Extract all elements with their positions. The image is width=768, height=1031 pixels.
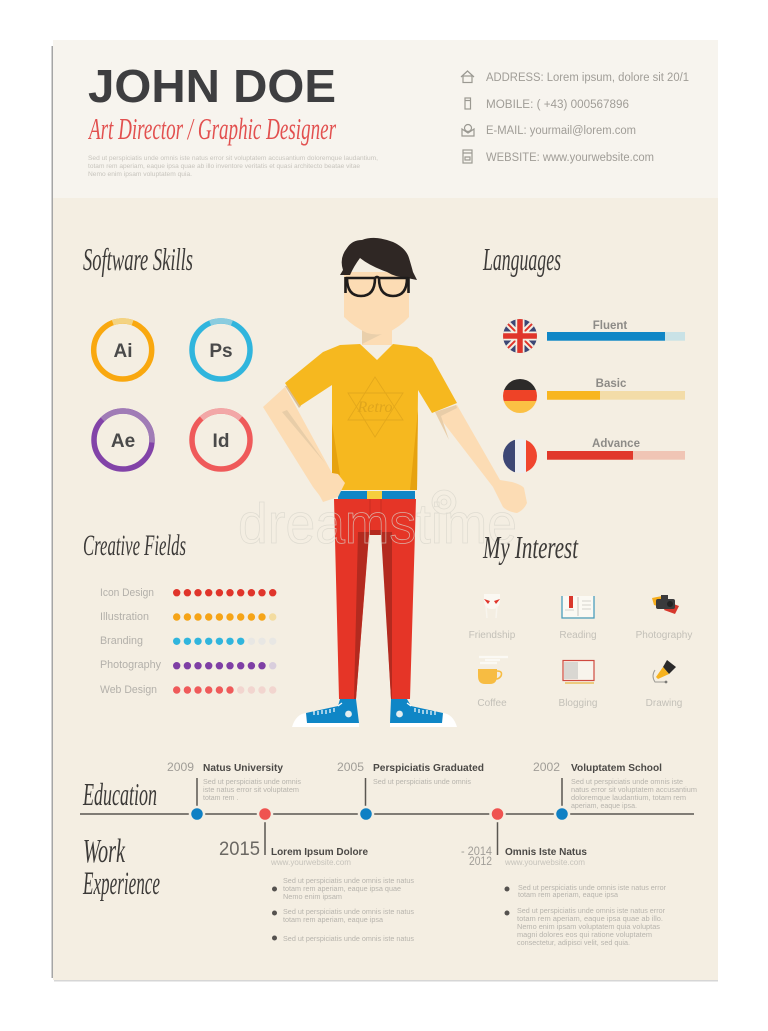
heading (82, 833, 160, 902)
entry: Voluptatem School: Sed ut perspiciatis unde omnis iste (571, 779, 683, 786)
icon: email (462, 124, 474, 136)
panel: languages (482, 241, 685, 473)
entry: Lorem Ipsum Dolore: Sed ut perspiciatis unde omnis iste natus (283, 909, 415, 916)
intro text: Nemo enim ipsam voluptatem quia. (88, 171, 192, 178)
ring: Id: Id (213, 431, 229, 452)
entry: Omnis Iste Natus: - 2014 (461, 846, 493, 858)
entry: Omnis Iste Natus: magni dolores eos qui ratione voluptatem (517, 932, 652, 939)
timeline axis (80, 813, 694, 815)
flag: Germany (503, 379, 537, 413)
entry: Omnis Iste Natus: 2012 (469, 856, 492, 868)
entry: Omnis Iste Natus: Omnis Iste Natus (505, 846, 587, 858)
entry: Lorem Ipsum Dolore: Sed ut perspiciatis unde omnis iste natus (283, 878, 415, 885)
intro text: totam rem aperiam, eaque ipsa quae ab illo inventore veritatis et quasi architecto beatae vitae (88, 163, 360, 170)
entry: Omnis Iste Natus: consectetur, adipisci velit, sed quia. (517, 940, 630, 947)
hand (313, 473, 345, 502)
nodes (190, 807, 569, 821)
neck shadow (362, 330, 390, 344)
row: photography (100, 659, 276, 671)
character illustration (263, 238, 527, 727)
icon: home (461, 71, 474, 82)
heading: Languages (482, 241, 561, 277)
heading: Experience (82, 866, 160, 902)
pants (334, 499, 416, 699)
heading: My Interest (482, 529, 579, 565)
row: web design (100, 684, 276, 696)
icon: drawing (653, 660, 676, 683)
shirt logo: Retro (357, 399, 392, 416)
row: branding (100, 635, 276, 647)
entry: Voluptatem School (533, 762, 697, 810)
resume infographic (52, 40, 718, 982)
entry: Voluptatem School: doloremque laudantium, totam rem (571, 795, 686, 802)
entry: Omnis Iste Natus: totam rem aperiam, eaque ipsa (518, 892, 618, 899)
entry: Natus University: totam rem . (203, 795, 238, 802)
icon: coffee (478, 657, 508, 684)
shirt logo (348, 377, 403, 437)
entry: Natus University: 2009 (167, 762, 194, 774)
label: coffee: Coffee (477, 698, 507, 709)
mobile: MOBILE: ( +43) 000567896 (486, 99, 629, 111)
flag: France (503, 439, 537, 473)
entry: Voluptatem School: Voluptatem School (571, 762, 662, 774)
basic bar (547, 391, 685, 400)
header: name and title (88, 60, 378, 178)
entry: Voluptatem School: 2002 (533, 762, 560, 774)
name: JOHN DOE (88, 60, 336, 112)
ring: Ps: Ps (209, 341, 233, 362)
entry: Omnis Iste Natus: Sed ut perspiciatis unde omnis iste natus error (517, 908, 666, 915)
ring: Ae: Ae (111, 431, 135, 452)
entry: Natus University (167, 762, 302, 802)
entry: Natus University: Natus University (203, 762, 283, 774)
intro text (88, 155, 378, 178)
entry: Omnis Iste Natus: totam rem aperiam, eaque ipsa quae ab illo. (517, 916, 663, 923)
entry: Lorem Ipsum Dolore: Sed ut perspiciatis unde omnis iste natus (283, 936, 415, 943)
right arm shadow (435, 405, 457, 440)
page background (52, 40, 718, 982)
ring: Id (192, 411, 250, 469)
stems (197, 778, 562, 855)
entry: Perspiciatis Graduated: Perspiciatis Graduated (373, 762, 484, 774)
hair (340, 238, 417, 280)
heading: Work (83, 833, 126, 870)
fluent bar (547, 332, 685, 341)
left arm (263, 387, 345, 500)
entry: Perspiciatis Graduated: 2005 (337, 762, 364, 774)
entry: Lorem Ipsum Dolore: Lorem Ipsum Dolore (271, 846, 368, 858)
left arm shadow (282, 410, 325, 463)
entry: Lorem Ipsum Dolore: totam rem aperiam, eaque ipsa quae (283, 886, 401, 893)
address: ADDRESS: Lorem ipsum, dolore sit 20/1 (486, 72, 689, 84)
row: icon design (100, 587, 276, 599)
flag: UK (503, 319, 537, 353)
heading: Creative Fields (83, 529, 186, 562)
ring: Ps (192, 321, 250, 379)
ring: Ai (94, 321, 152, 379)
education (82, 762, 697, 812)
work experience (82, 833, 667, 947)
entry: Lorem Ipsum Dolore: www.yourwebsite.com (270, 857, 351, 867)
panel: creative fields (83, 529, 276, 696)
fluent label: Fluent (593, 320, 627, 332)
contact details (461, 71, 689, 164)
row: branding: Branding (100, 635, 143, 647)
row: photography: Photography (100, 659, 161, 671)
right shoe (390, 699, 457, 727)
glasses (346, 277, 408, 296)
advance label: Advance (592, 438, 640, 450)
entry: Omnis Iste Natus (461, 846, 667, 947)
entry: Perspiciatis Graduated (337, 762, 484, 786)
entry: Perspiciatis Graduated: Sed ut perspiciatis unde omnis (373, 779, 472, 786)
panel: software skills (83, 241, 250, 469)
label: reading: Reading (559, 630, 597, 641)
basic label: Basic (596, 378, 627, 390)
entry: Voluptatem School: aperiam, eaque ipsa. (571, 803, 637, 810)
label: drawing: Drawing (646, 698, 682, 709)
email: E-MAIL: yourmail@lorem.com (486, 125, 636, 137)
row: icon design: Icon Design (100, 587, 154, 599)
row: illustration (100, 611, 276, 623)
icon: mobile (465, 98, 470, 109)
pants shadows (354, 530, 392, 699)
entry: Omnis Iste Natus: www.yourwebsite.com (504, 857, 585, 867)
icon: blogging (563, 660, 594, 683)
job title: Art Director / Graphic Designer (88, 111, 337, 146)
label: photography: Photography (636, 630, 692, 641)
icon: photography (652, 595, 679, 614)
entry: Lorem Ipsum Dolore: Nemo enim ipsam (283, 894, 342, 901)
face (344, 272, 409, 334)
shirt side folds (332, 410, 418, 490)
icon: friendship (484, 594, 500, 618)
pants fly seams (370, 499, 381, 530)
timeline (80, 778, 694, 855)
entry: Omnis Iste Natus: Sed ut perspiciatis unde omnis iste natus error (518, 885, 667, 892)
entry: Natus University: iste natus error sit voluptatem (203, 787, 299, 794)
label: blogging: Blogging (559, 698, 597, 709)
entry: Lorem Ipsum Dolore: 2015 (219, 839, 260, 860)
entry: Natus University: Sed ut perspiciatis unde omnis (203, 779, 302, 786)
intro text: Sed ut perspiciatis unde omnis iste natus error sit voluptatem accusantium doloremque laudantium, (88, 155, 378, 162)
entry: Lorem Ipsum Dolore: totam rem aperiam, eaque ipsa (283, 917, 383, 924)
panel: my interest (469, 529, 692, 709)
entry: Omnis Iste Natus: Nemo enim ipsam voluptatem quia voluptas (517, 924, 661, 931)
ring: Ae (94, 411, 152, 469)
row: illustration: Illustration (100, 611, 149, 623)
belt (338, 491, 415, 499)
entry: Lorem Ipsum Dolore (219, 839, 415, 943)
ring: Ai: Ai (114, 341, 132, 362)
neck (362, 325, 392, 345)
row: web design: Web Design (100, 684, 157, 696)
watermark: dreamstime (238, 492, 517, 556)
left shoe (292, 699, 359, 727)
website: WEBSITE: www.yourwebsite.com (486, 152, 654, 164)
heading: Software Skills (83, 241, 193, 277)
icon: reading (562, 596, 594, 618)
shirt (285, 344, 457, 490)
advance bar (547, 451, 685, 460)
right arm (436, 405, 527, 513)
entry: Voluptatem School: natus error sit voluptatem accusantium (571, 787, 697, 794)
label: friendship: Friendship (469, 630, 516, 641)
left sleeve shadow (285, 385, 301, 408)
heading: Education (82, 776, 157, 812)
icon: website (463, 150, 472, 163)
